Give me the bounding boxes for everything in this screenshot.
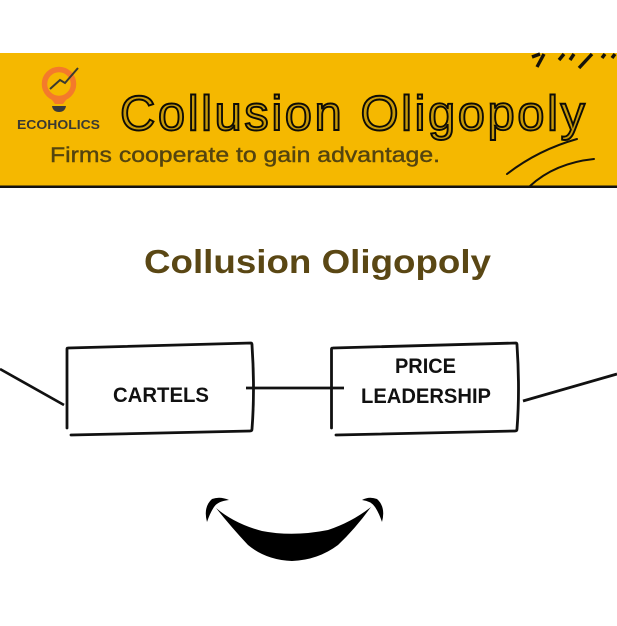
decoration: hatch marks (532, 54, 615, 68)
panel: cartels box (67, 343, 254, 435)
main heading: Collusion Oligopoly (144, 243, 492, 280)
icon: smile (206, 498, 383, 561)
label: cartels: CARTELS (113, 383, 209, 407)
panel: header banner (0, 53, 617, 188)
label: price leadership: PRICE (395, 354, 456, 378)
banner title: Collusion Oligopoly (120, 87, 586, 141)
glasses bridge connector (246, 387, 344, 389)
label: price leadership (361, 354, 491, 408)
banner subtitle: Firms cooperate to gain advantage. (50, 143, 440, 167)
panel: price leadership box (332, 343, 518, 435)
left temple arm (0, 369, 64, 405)
icon: ecoholics lightbulb logo (44, 68, 78, 112)
glasses diagram (0, 343, 617, 435)
decoration: curved strokes (507, 139, 594, 186)
label: price leadership: LEADERSHIP (361, 384, 491, 408)
logo wordmark: ECOHOLICS (17, 118, 100, 132)
right temple arm (523, 374, 617, 401)
